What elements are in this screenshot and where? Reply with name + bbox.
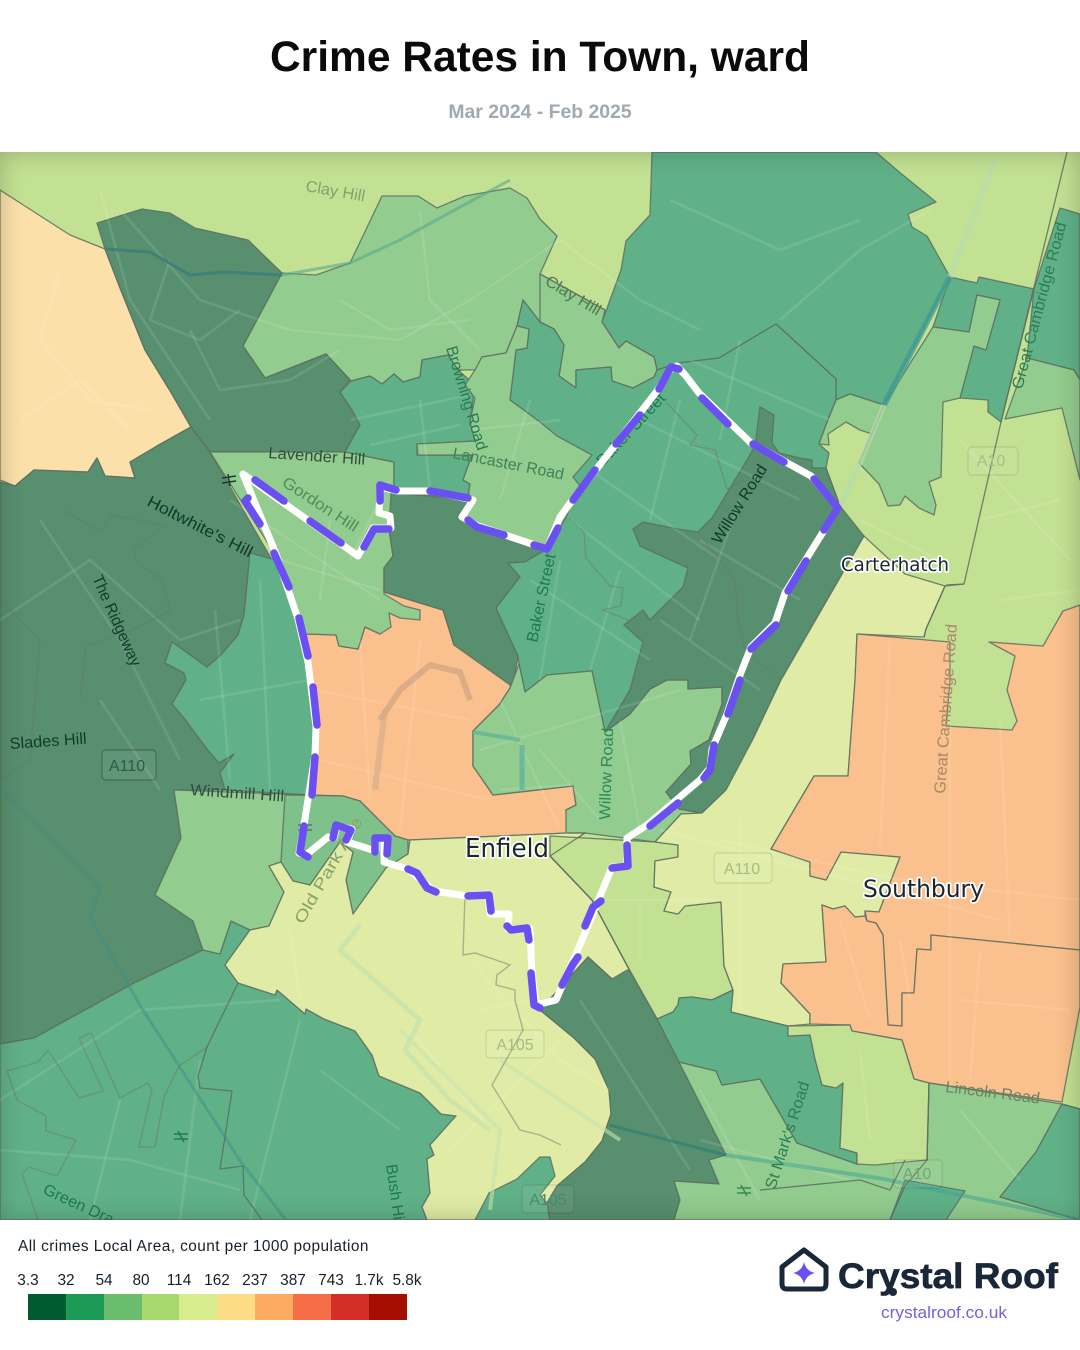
street name labels: Holtwhite's Hill bbox=[144, 493, 255, 561]
street name labels: Willow Road bbox=[597, 728, 617, 820]
legend tick values: 5.8k bbox=[392, 1272, 422, 1289]
legend tick values: 32 bbox=[57, 1272, 75, 1289]
legend tick values: 114 bbox=[167, 1272, 192, 1289]
legend scale bbox=[17, 1272, 422, 1320]
road shield labels: A10 bbox=[903, 1166, 931, 1183]
legend tick values: 237 bbox=[242, 1272, 268, 1289]
road shield labels: A105 bbox=[496, 1037, 534, 1054]
place label: Enfield: Enfield bbox=[465, 834, 549, 864]
wordmark descender dot bbox=[889, 1288, 897, 1296]
street name labels: Bush Hi bbox=[382, 1163, 407, 1220]
street name labels: Lavender Hill bbox=[268, 445, 366, 469]
street name labels: Lancaster Road bbox=[451, 445, 565, 483]
legend tick values: 387 bbox=[280, 1272, 306, 1289]
street name labels: Windmill Hill bbox=[190, 782, 285, 806]
place label: Carterhatch: Carterhatch bbox=[841, 554, 949, 576]
choropleth ward polygons bbox=[0, 152, 1080, 1220]
website link: crystalroof.co.uk bbox=[881, 1304, 1008, 1322]
street name labels: Great Cambridge Road bbox=[932, 624, 961, 794]
wordmark: Crystal Roof bbox=[838, 1257, 1058, 1296]
title: Crime Rates in Town, ward bbox=[270, 34, 810, 81]
street name labels: Willow Road bbox=[709, 462, 771, 547]
street name labels: Great Cambridge Road bbox=[1009, 220, 1070, 391]
street name labels: Old Park Ave bbox=[292, 814, 367, 927]
road shield labels: A110 bbox=[109, 758, 145, 775]
legend tick values: 3.3 bbox=[17, 1272, 39, 1289]
thin inner ward boundaries bbox=[0, 402, 1080, 1220]
icon: house with star bbox=[782, 1250, 826, 1289]
street name labels: Baker Street bbox=[524, 552, 560, 644]
street name labels: Clay Hill bbox=[542, 273, 604, 319]
ward outline: white route with purple dashes bbox=[243, 366, 838, 1008]
street name labels: Clay Hill bbox=[304, 178, 366, 205]
street name labels: St Mark's Road bbox=[763, 1079, 813, 1191]
road shield labels: A110 bbox=[724, 861, 760, 878]
legend title: All crimes Local Area, count per 1000 population bbox=[18, 1238, 369, 1255]
street name labels: Slades Hill bbox=[9, 731, 87, 753]
legend tick values: 54 bbox=[95, 1272, 113, 1289]
rail station symbols bbox=[174, 474, 751, 1196]
street name labels: The Ridgeway bbox=[88, 573, 144, 669]
street name labels: Lincoln Road bbox=[945, 1079, 1041, 1108]
roads, rivers and faint map texture bbox=[0, 160, 1080, 1220]
street name labels bbox=[9, 178, 1070, 1229]
street name labels: Gordon Hill bbox=[279, 474, 361, 536]
legend tick values: 743 bbox=[318, 1272, 344, 1289]
map panel bbox=[0, 152, 1080, 1220]
subtitle: date range: Mar 2024 - Feb 2025 bbox=[448, 101, 632, 123]
legend tick values: 80 bbox=[132, 1272, 150, 1289]
legend tick values bbox=[17, 1272, 422, 1289]
street name labels: Browning Road bbox=[442, 344, 490, 452]
road shields bbox=[102, 447, 1018, 1213]
logo: Crystal Roof bbox=[780, 1247, 1058, 1322]
road shield labels: A10 bbox=[977, 453, 1005, 470]
road shield labels: A105 bbox=[529, 1192, 567, 1209]
legend tick values: 1.7k bbox=[354, 1272, 384, 1289]
place label: Southbury: Southbury bbox=[863, 875, 984, 903]
street name labels: Baker Street bbox=[593, 390, 670, 470]
legend tick values: 162 bbox=[204, 1272, 230, 1289]
legend colour bar bbox=[28, 1294, 407, 1320]
road shield labels bbox=[109, 453, 1005, 1209]
map edge vignette bbox=[0, 152, 1080, 1220]
